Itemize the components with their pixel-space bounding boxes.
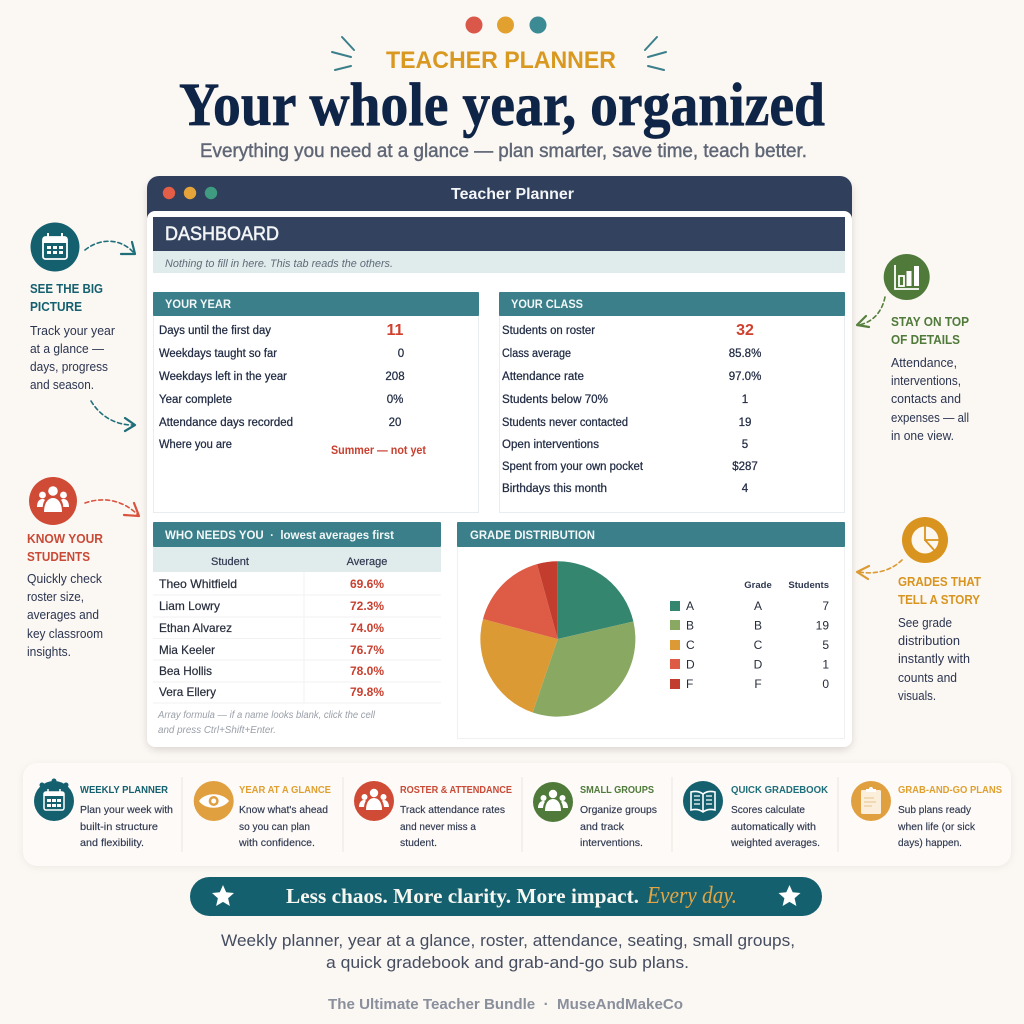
icon: people: [354, 781, 394, 821]
text: student.: [400, 837, 437, 849]
text: SMALL GROUPS: [580, 784, 654, 796]
table rows: 69.6%: [350, 577, 384, 591]
panel: your year: [153, 292, 479, 512]
text: [897, 784, 1002, 849]
body text: interventions,: [891, 374, 961, 388]
class rows: Attendance rate: [502, 371, 584, 383]
body text: expenses — all: [891, 411, 969, 425]
table rows: 79.8%: [350, 685, 384, 699]
grade table: C: [754, 638, 763, 652]
year rows: 20: [389, 417, 401, 429]
body text: days, progress: [30, 360, 108, 374]
text: days) happen.: [898, 837, 962, 849]
subtitle: Everything you need at a glance — plan smarter, save time, teach better.: [200, 141, 807, 162]
heading: OF DETAILS: [891, 333, 960, 347]
legend: B: [686, 618, 694, 632]
feature strip shadow: [23, 765, 1011, 867]
grade table: [744, 580, 829, 691]
text: WEEKLY PLANNER: [80, 784, 168, 796]
legend: D: [686, 658, 695, 672]
eyebrow: TEACHER PLANNER: [386, 47, 616, 74]
year rows: Summer — not yet: [331, 445, 426, 457]
year rows: Weekdays left in the year: [159, 371, 287, 383]
decorative three dots: [466, 16, 546, 34]
text: built-in structure: [80, 821, 158, 833]
text: weighted averages.: [730, 837, 820, 849]
heading: your class: YOUR CLASS: [511, 297, 583, 311]
text: when life (or sick: [897, 821, 976, 833]
text: [730, 784, 828, 849]
text: with confidence.: [238, 837, 315, 849]
callout: see the big picture: [30, 222, 115, 392]
text: and never miss a: [400, 821, 476, 833]
feature: roster and attendance: [354, 781, 512, 849]
body text: at a glance —: [30, 342, 104, 356]
table rows: Theo Whitfield: [159, 577, 237, 591]
grade table: A: [754, 599, 762, 613]
panel: your class: [499, 292, 845, 512]
body text: averages and: [27, 608, 99, 622]
body text: visuals.: [898, 689, 936, 703]
heading: PICTURE: [30, 300, 82, 314]
dashboard banner: [153, 217, 845, 251]
heading: grade distribution: GRADE DISTRIBUTION: [470, 528, 595, 542]
heading: [30, 282, 103, 314]
year rows: [159, 322, 426, 457]
icon: calendar: [34, 778, 74, 821]
class rows: 4: [742, 483, 749, 495]
legend: [670, 599, 695, 691]
year rows: 0%: [387, 394, 403, 406]
class rows: $287: [732, 461, 758, 473]
text: and flexibility.: [80, 837, 144, 849]
dashboard banner: DASHBOARD: [165, 224, 279, 245]
table header: Student: [211, 556, 249, 568]
heading: [27, 532, 103, 564]
grade table: B: [754, 618, 762, 632]
class rows: 19: [739, 417, 751, 429]
heading: SEE THE BIG: [30, 282, 103, 296]
heading: who needs you: WHO NEEDS YOU · lowest averages first: [165, 528, 394, 542]
text: Track attendance rates: [400, 804, 505, 816]
table header: Average: [347, 556, 387, 568]
class rows: [502, 322, 761, 495]
table rows: Liam Lowry: [159, 599, 220, 613]
year rows: 0: [398, 348, 404, 360]
heading: grade distribution: [457, 522, 845, 547]
text: so you can plan: [239, 821, 310, 833]
icon: calendar: [30, 222, 80, 272]
heading: [898, 575, 981, 607]
year rows: Days until the first day: [159, 325, 271, 337]
feature: weekly planner: [34, 778, 173, 849]
dashboard note: [153, 251, 845, 273]
icon: star right: [778, 885, 800, 906]
icon: clipboard: [851, 781, 891, 821]
text: [400, 784, 512, 849]
app window: [147, 176, 852, 747]
class rows: 1: [742, 394, 748, 406]
closing summary: [221, 931, 795, 972]
table rows: Ethan Alvarez: [159, 621, 232, 635]
arrow: grades to chart: [857, 560, 902, 579]
text: Know what's ahead: [239, 804, 328, 816]
class rows: 97.0%: [729, 371, 761, 383]
table rows: [159, 577, 384, 699]
class rows: Birthdays this month: [502, 483, 607, 495]
dashboard note: Nothing to fill in here. This tab reads the others.: [165, 258, 393, 270]
text: [580, 784, 657, 849]
year rows: Weekdays taught so far: [159, 348, 277, 360]
text: Organize groups: [580, 804, 657, 816]
text: [238, 784, 331, 849]
body text: [898, 616, 970, 703]
header group: [179, 16, 825, 162]
sparkle lines right: [645, 37, 666, 70]
text: GRAB-AND-GO PLANS: [898, 784, 1002, 796]
class rows: Spent from your own pocket: [502, 461, 644, 473]
icon: people: [533, 782, 573, 822]
window body: [147, 211, 852, 747]
year rows: Where you are: [159, 439, 232, 451]
legend: A: [686, 599, 694, 613]
heading: who needs you: [153, 522, 441, 547]
body text: [891, 356, 969, 443]
body text: See grade: [898, 616, 952, 630]
table header: [153, 547, 441, 572]
body text: roster size,: [27, 590, 84, 604]
text: and track: [580, 821, 625, 833]
body text: distribution: [898, 634, 960, 648]
arrow: students to table: [85, 500, 139, 516]
body text: Quickly check: [27, 572, 103, 586]
grade table: Students: [788, 580, 829, 591]
title: Your whole year, organized: [179, 72, 825, 139]
sparkle lines left: [332, 37, 354, 70]
table rows: Mia Keeler: [159, 643, 215, 657]
title bar: [147, 176, 852, 225]
legend: C: [686, 638, 695, 652]
text: Plan your week with: [80, 804, 173, 816]
icon: bar chart: [884, 254, 930, 300]
class rows: 85.8%: [729, 348, 761, 360]
heading: your class: [499, 292, 845, 316]
heading: TELL A STORY: [898, 593, 981, 607]
heading: STAY ON TOP: [891, 315, 969, 329]
body text: contacts and: [891, 392, 961, 406]
footnote: and press Ctrl+Shift+Enter.: [158, 725, 276, 736]
year rows: 208: [385, 371, 405, 383]
text: automatically with: [731, 821, 816, 833]
text: QUICK GRADEBOOK: [731, 784, 828, 796]
heading: KNOW YOUR: [27, 532, 103, 546]
tagline banner: [190, 877, 822, 916]
grade table: Grade: [744, 580, 772, 591]
table rows: 72.3%: [350, 599, 384, 613]
closing summary: Weekly planner, year at a glance, roster, attendance, seating, small groups,: [221, 931, 795, 950]
table rows: 78.0%: [350, 664, 384, 678]
tagline accent: Every day.: [646, 883, 737, 909]
icon: star left: [212, 885, 234, 906]
table rows: 74.0%: [350, 621, 384, 635]
callout: stay on top of details: [884, 254, 969, 443]
callout: grades that tell a story: [898, 517, 981, 703]
table rows: 76.7%: [350, 643, 384, 657]
text: Sub plans ready: [898, 804, 972, 816]
year rows: Attendance days recorded: [159, 417, 293, 429]
footnote: Array formula — if a name looks blank, click the cell: [157, 710, 376, 721]
text: interventions.: [580, 837, 643, 849]
grade table: 5: [822, 638, 829, 652]
heading: GRADES THAT: [898, 575, 981, 589]
heading: your year: YOUR YEAR: [165, 297, 231, 311]
panel: grade distribution: [457, 522, 845, 738]
table rows: Vera Ellery: [159, 685, 216, 699]
body text: key classroom: [27, 627, 103, 641]
heading: [891, 315, 969, 347]
body text: in one view.: [891, 429, 954, 443]
closing summary: a quick gradebook and grab-and-go sub plans.: [326, 953, 689, 972]
class rows: Class average: [502, 348, 571, 360]
body text: instantly with: [898, 652, 970, 666]
legend: F: [686, 677, 693, 691]
icon: open book: [683, 781, 723, 821]
year rows: Year complete: [159, 394, 232, 406]
class rows: Students on roster: [502, 325, 595, 337]
callout: know your students: [27, 477, 103, 659]
body text: and season.: [30, 378, 94, 392]
body text: [27, 572, 103, 659]
feature strip: [23, 763, 1011, 866]
panel: who needs you: [153, 522, 441, 736]
body text: Track your year: [30, 324, 115, 338]
table rows: Bea Hollis: [159, 664, 212, 678]
grade table: 1: [822, 658, 829, 672]
year rows: 11: [387, 322, 404, 339]
feature: grab-and-go plans: [851, 781, 1002, 849]
feature: quick gradebook: [683, 781, 828, 849]
text: ROSTER & ATTENDANCE: [400, 784, 512, 796]
title bar: Teacher Planner: [451, 186, 574, 203]
body text: counts and: [898, 671, 957, 685]
window shadow: [147, 182, 852, 750]
feature: small groups: [533, 782, 657, 849]
heading: your year: [153, 292, 479, 316]
feature: year at a glance: [194, 781, 331, 849]
grade table: 19: [816, 618, 829, 632]
class rows: Students never contacted: [502, 417, 628, 429]
grade table: D: [754, 658, 763, 672]
footnote: [157, 710, 376, 736]
class rows: 32: [736, 322, 754, 339]
class rows: Students below 70%: [502, 394, 608, 406]
footer credit: The Ultimate Teacher Bundle · MuseAndMakeCo: [328, 996, 683, 1013]
grade table: 0: [822, 677, 829, 691]
pie chart: [480, 561, 635, 717]
grade table: 7: [822, 599, 829, 613]
grade table: F: [754, 677, 762, 691]
class rows: 5: [742, 439, 748, 451]
text: YEAR AT A GLANCE: [239, 784, 331, 796]
arrow: calendar to dashboard: [85, 241, 135, 254]
icon: people: [29, 477, 77, 525]
text: Scores calculate: [731, 804, 805, 816]
tagline text: Less chaos. More clarity. More impact.: [286, 884, 639, 908]
class rows: Open interventions: [502, 439, 599, 451]
icon: pie ring: [902, 517, 948, 563]
body text: [30, 324, 115, 392]
heading: STUDENTS: [27, 550, 90, 564]
arrow: text to your year: [91, 401, 135, 431]
text: [80, 784, 173, 849]
body text: Attendance,: [891, 356, 957, 370]
body text: insights.: [27, 645, 71, 659]
arrow: details to your class: [857, 297, 885, 327]
icon: eye: [194, 781, 234, 821]
